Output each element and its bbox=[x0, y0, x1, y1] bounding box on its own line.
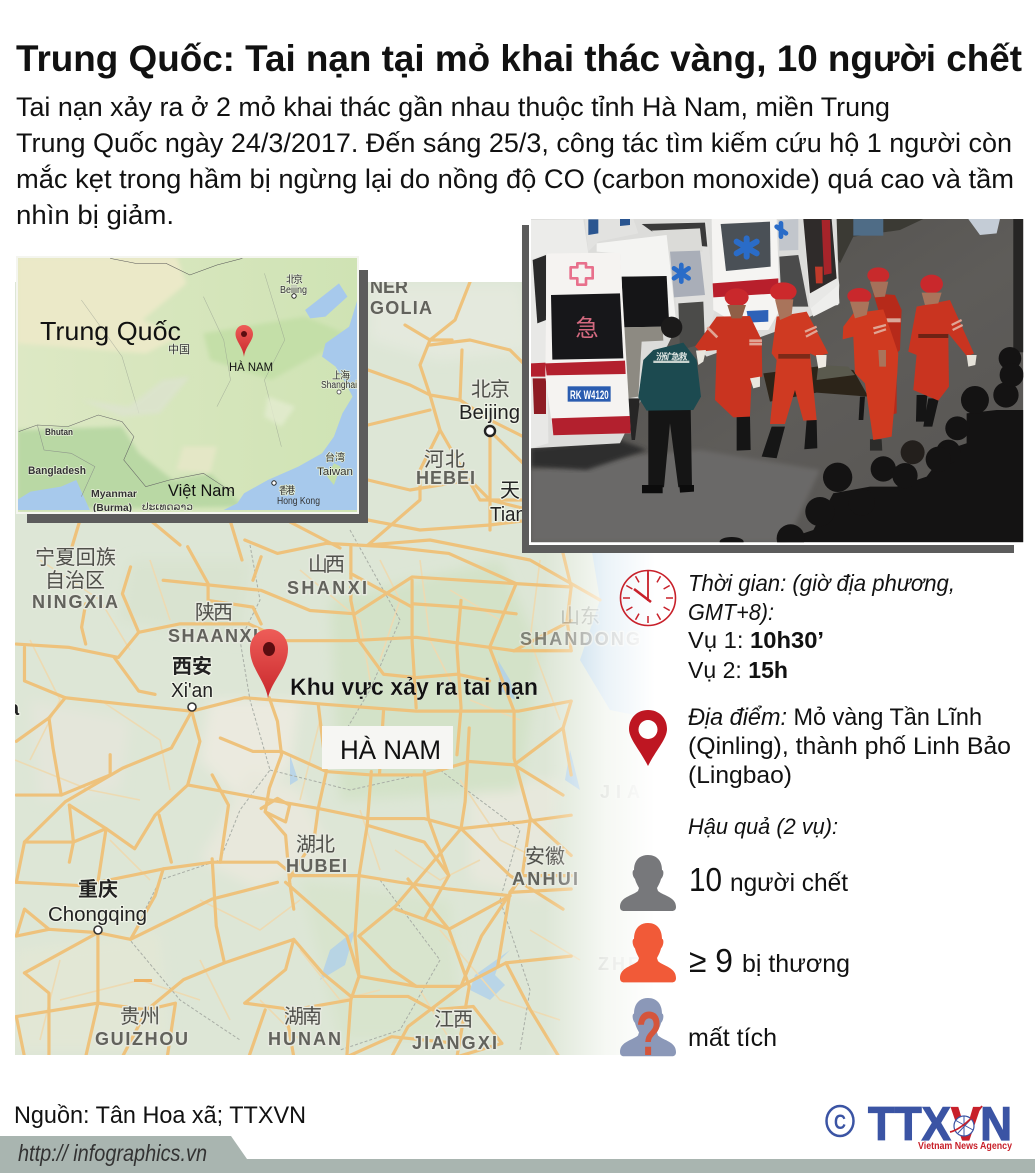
inset labels: Hong Kong bbox=[277, 496, 320, 507]
map cities: Xi'an bbox=[171, 680, 213, 702]
map terrain patches bbox=[203, 564, 552, 1032]
photo crowd bbox=[720, 347, 1024, 552]
text: injured: ≥ 9 bbox=[689, 942, 733, 979]
icon: person dead bbox=[620, 855, 676, 911]
inset labels: 北京 bbox=[286, 273, 303, 286]
photo stretcher bbox=[763, 367, 868, 402]
intro text block: Trung Quốc ngày 24/3/2017. Đến sáng 25/3, công tác tìm kiếm cứu hộ 1 người còn bbox=[16, 128, 1012, 158]
shadow: photo bbox=[522, 225, 1014, 553]
photo second ambulance bbox=[596, 235, 676, 318]
intro text block: nhìn bị giảm. bbox=[16, 200, 174, 230]
text: time: GMT+8): bbox=[688, 599, 774, 625]
map place names: English bbox=[32, 277, 640, 1053]
inset labels: Bhutan bbox=[45, 427, 73, 437]
shadow: inset map bbox=[27, 270, 368, 523]
inset sea bbox=[224, 293, 359, 510]
text: time: Vụ 1: 10h30’ bbox=[688, 627, 824, 653]
map roads: orange highways bbox=[16, 540, 571, 1057]
photo rescuer 5 bbox=[908, 275, 977, 427]
map fade to white bbox=[549, 553, 655, 1055]
map place names: English: SHANXI bbox=[287, 578, 367, 598]
map place names: Chinese: 宁夏回族 bbox=[35, 546, 116, 569]
footer url: http:// infographics.vn bbox=[18, 1140, 207, 1166]
map short road mark bbox=[134, 979, 152, 982]
inset labels: Shanghai bbox=[321, 380, 357, 391]
text: time bbox=[688, 570, 955, 683]
map place names: Chinese: 重庆 bbox=[78, 878, 118, 901]
map place names: English: NINGXIA bbox=[32, 592, 118, 612]
photo main ambulance door bbox=[545, 253, 631, 435]
photo man in green jacket: 汾矿急救 bbox=[656, 350, 688, 361]
logo copyright mark bbox=[826, 1106, 854, 1136]
panel: rescue photo: 急 bbox=[575, 315, 599, 341]
inset labels: 中国 bbox=[168, 343, 190, 356]
photo man in green jacket bbox=[638, 317, 701, 493]
text: location: (Lingbao) bbox=[688, 762, 792, 789]
map place names: English: JIA bbox=[600, 782, 640, 802]
text: location: Địa điểm: Mỏ vàng Tần Lĩnh bbox=[688, 704, 982, 731]
map cities: Beijing bbox=[459, 402, 520, 424]
logo wordmark: TTXVN bbox=[868, 1097, 1012, 1150]
icon: person missing bbox=[620, 998, 676, 1069]
photo ground bbox=[531, 219, 1023, 542]
map cities: a bbox=[8, 698, 20, 720]
map place names: Chinese: 江西 bbox=[434, 1008, 473, 1031]
inset desert zone bbox=[17, 257, 186, 353]
map sea and lakes bbox=[290, 553, 616, 1000]
logo globe bbox=[950, 1106, 982, 1136]
label: Hà Nam: HÀ NAM bbox=[340, 735, 441, 765]
photo rescuer 2 bbox=[762, 282, 828, 458]
map place names: Chinese bbox=[35, 378, 600, 1031]
info panel bbox=[620, 570, 1011, 1069]
text: time: Vụ 2: 15h bbox=[688, 657, 788, 683]
icon: inset pin bbox=[236, 325, 253, 357]
map place names: Chinese: 贵州 bbox=[120, 1005, 160, 1028]
photo van backdrop bbox=[531, 219, 839, 448]
text: location bbox=[688, 704, 1011, 789]
map place names: English: HUNAN bbox=[268, 1029, 341, 1049]
text: deaths: 10 bbox=[689, 861, 722, 898]
photo third ambulance bbox=[640, 222, 715, 343]
map place names: Chinese: 山东 bbox=[560, 605, 600, 628]
photo rear ambulance bbox=[712, 219, 780, 330]
icon: person injured bbox=[620, 923, 676, 982]
inset labels: Myanmar bbox=[91, 489, 137, 500]
map place names: English: HEBEI bbox=[416, 468, 475, 488]
map province borders bbox=[130, 530, 530, 1050]
panel: rescue photo bbox=[529, 217, 1024, 552]
logo tagline: Vietnam News Agency bbox=[918, 1141, 1012, 1152]
text: location: (Qinling), thành phố Linh Bảo bbox=[688, 733, 1011, 760]
photo far-left ambulance bbox=[531, 219, 588, 260]
inset labels: Trung Quốc bbox=[40, 316, 181, 346]
map place names: Chinese: 西安 bbox=[172, 655, 212, 678]
map place names: English: ANHUI bbox=[512, 869, 578, 889]
map cities: Tian bbox=[490, 504, 526, 526]
inset labels: Beijing bbox=[280, 285, 307, 296]
map place names: Chinese: 山西 bbox=[308, 553, 345, 576]
panel: rescue photo: RK W4120 bbox=[570, 388, 609, 402]
map place names: Chinese: 北京 bbox=[471, 378, 510, 401]
intro text block: mắc kẹt trong hầm bị ngừng lại do nồng độ CO (carbon monoxide) quá cao và tầm bbox=[16, 163, 1014, 194]
inset borders bbox=[19, 258, 285, 497]
inset labels: HÀ NAM bbox=[229, 359, 273, 374]
photo top background bbox=[833, 219, 923, 263]
inset labels: 台湾 bbox=[325, 451, 345, 464]
map place names: Chinese: 陕西 bbox=[195, 601, 233, 624]
text: missing: mất tích bbox=[688, 1024, 777, 1052]
text: deaths: người chết bbox=[730, 869, 848, 897]
icon: clock bbox=[620, 570, 676, 626]
map place names: Chinese: 自治区 bbox=[45, 569, 105, 592]
map place names: English: HUBEI bbox=[286, 856, 347, 876]
map place names: Chinese: 湖南 bbox=[284, 1005, 322, 1028]
inset forest zone bbox=[17, 427, 244, 510]
map roads: thin secondary bbox=[15, 560, 580, 1040]
icon: location marker bbox=[629, 710, 667, 766]
text: injured: bị thương bbox=[742, 950, 850, 978]
inset labels: 上海 bbox=[332, 369, 350, 382]
icon: accident location pin bbox=[250, 629, 288, 698]
icon: person missing: ? bbox=[636, 1000, 662, 1069]
map place names: Chinese: 天 bbox=[500, 480, 520, 502]
logo: TTXVN bbox=[826, 1097, 1012, 1152]
panel: inset China map bbox=[16, 256, 359, 514]
map place names: Chinese: 河北 bbox=[424, 448, 465, 471]
photo blue stars bbox=[674, 223, 786, 282]
inset labels: (Burma) bbox=[93, 503, 132, 514]
panel: main regional map bbox=[8, 277, 660, 1057]
intro text block: Tai nạn xảy ra ở 2 mỏ khai thác gần nhau thuộc tỉnh Hà Nam, miền Trung bbox=[16, 92, 890, 122]
text: injured bbox=[689, 942, 850, 979]
label: accident area: Khu vực xảy ra tai nạn bbox=[290, 674, 538, 701]
inset labels bbox=[28, 273, 357, 514]
map cities: Chongqing bbox=[48, 904, 147, 926]
photo rescuer 3 bbox=[843, 288, 898, 451]
source line: Nguồn: Tân Hoa xã; TTXVN bbox=[14, 1102, 306, 1129]
map roads: north section bbox=[68, 282, 600, 600]
map place names: Chinese: 湖北 bbox=[296, 833, 335, 856]
map cities bbox=[8, 402, 526, 934]
map place names: English: GOLIA bbox=[370, 298, 432, 318]
text: time: Thời gian: (giờ địa phương, bbox=[688, 570, 955, 596]
inset Taiwan bbox=[327, 463, 341, 485]
inset labels: Việt Nam bbox=[168, 481, 235, 500]
title: Trung Quốc: Tai nạn tại mỏ khai thác vàng, 10 người chết bbox=[16, 38, 1022, 79]
inset labels: Bangladesh bbox=[28, 465, 86, 477]
map place names: English: SHAANXI bbox=[168, 626, 258, 646]
label: Hà Nam bbox=[322, 726, 453, 769]
map place names: English: ZHE bbox=[598, 954, 640, 974]
intro text block bbox=[16, 92, 1014, 230]
map place names: English: GUIZHOU bbox=[95, 1029, 188, 1049]
inset labels: 香港 bbox=[279, 485, 295, 497]
text: consequences heading: Hậu quả (2 vụ): bbox=[688, 814, 838, 839]
photo rescuer 4 bbox=[867, 267, 902, 415]
inset labels: Taiwan bbox=[317, 466, 353, 478]
inset snow relief bbox=[98, 378, 186, 416]
logo copyright mark: C bbox=[834, 1111, 846, 1134]
photo rescuer 1 bbox=[695, 288, 762, 451]
map place names: English: NER bbox=[370, 277, 408, 297]
text: deaths bbox=[689, 861, 848, 898]
inset labels: ປະເທດລາວ bbox=[142, 502, 193, 513]
map place names: English: SHANDONG bbox=[520, 629, 640, 649]
map place names: Chinese: 安徽 bbox=[525, 845, 565, 868]
map place names: English: JIANGXI bbox=[412, 1033, 497, 1053]
footer band bbox=[0, 1136, 1035, 1173]
